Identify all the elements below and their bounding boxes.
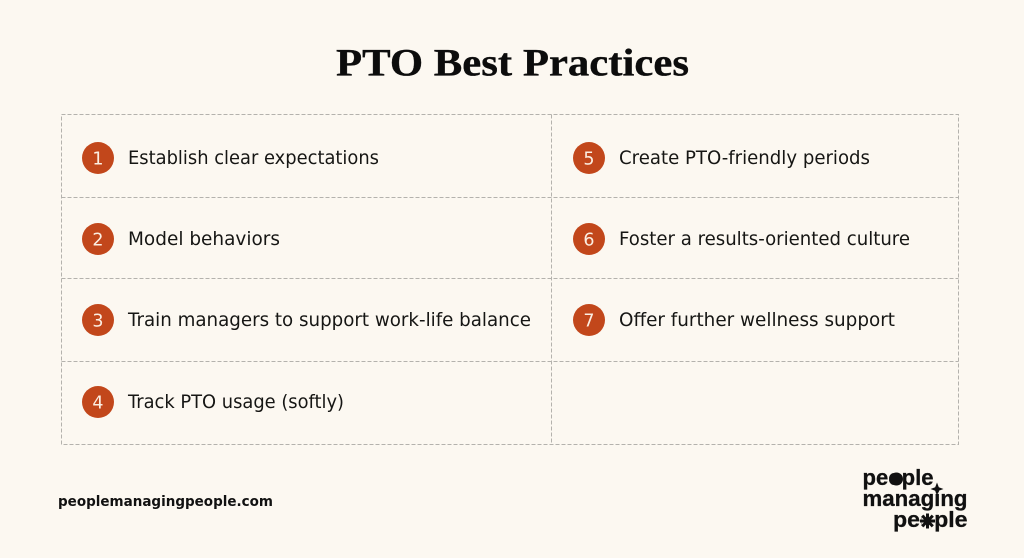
item 6: 6 [583,230,595,250]
item 7 [573,304,895,336]
website url: peoplemanagingpeople.com [58,494,273,510]
item 2: Model behaviors [128,229,280,250]
item 1: 1 [92,149,104,169]
item 5: 5 [583,149,595,169]
item 2 [82,223,280,255]
logo: people [862,465,934,490]
item 2: 2 [92,230,104,250]
logo: managing [862,486,968,511]
item 3: 3 [92,311,104,331]
item 6 [573,223,910,255]
logo [862,465,968,532]
item 3 [82,304,531,336]
item 4 [82,386,344,418]
table grid [62,114,958,444]
item 7: 7 [583,311,595,331]
title: PTO Best Practices [336,40,689,84]
item 4: Track PTO usage (softly) [127,392,344,413]
item 5 [573,142,870,174]
item 4: 4 [92,393,104,413]
item 1: Establish clear expectations [128,148,379,169]
item 7: Offer further wellness support [619,310,895,331]
item 6: Foster a results-oriented culture [619,229,910,250]
item 5: Create PTO-friendly periods [619,148,870,169]
item 3: Train managers to support work-life balance [127,310,531,331]
logo: people [893,507,968,532]
item 1 [82,142,379,174]
